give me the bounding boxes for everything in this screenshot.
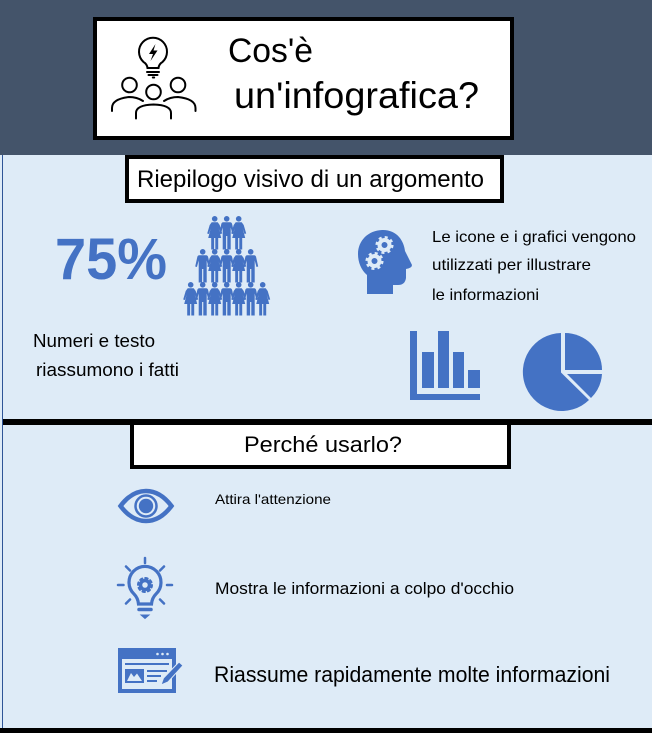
text: numbers and text: Numeri e testo xyxy=(33,331,155,351)
text: summarises quickly: Riassume rapidamente molte informazioni xyxy=(214,662,610,687)
header band xyxy=(0,0,652,155)
text: attention: Attira l'attenzione xyxy=(215,491,331,507)
heading: visual summary xyxy=(127,157,502,201)
bottom bar xyxy=(0,728,652,733)
text: at a glance: Mostra le informazioni a colpo d'occhio xyxy=(215,579,514,598)
text: numbers and text: riassumono i fatti xyxy=(36,360,179,380)
heading: why use it xyxy=(132,423,509,467)
heading: visual summary: Riepilogo visivo di un argomento xyxy=(137,166,484,193)
text: icons and charts: le informazioni xyxy=(432,287,539,304)
panel: title xyxy=(95,19,512,138)
title line 2: un'infografica? xyxy=(234,75,479,116)
text: icons and charts: utilizzati per illustrare xyxy=(432,257,591,274)
heading: why use it: Perché usarlo? xyxy=(244,432,402,457)
stat: 75%: 75% xyxy=(55,227,167,292)
icon: head with gears xyxy=(358,230,412,294)
text: icons and charts xyxy=(432,229,636,304)
icon: browser window with pencil xyxy=(118,648,183,693)
text: icons and charts: Le icone e i grafici vengono xyxy=(432,229,636,246)
left edge line xyxy=(2,155,3,730)
icon: people with lightbulb xyxy=(112,38,196,118)
icon: lightbulb with gear xyxy=(118,558,172,618)
icon: pie chart xyxy=(523,333,602,411)
text: numbers and text xyxy=(33,331,179,380)
icon: bar chart xyxy=(410,331,480,400)
icon: crowd of people xyxy=(183,216,270,316)
icon: eye xyxy=(120,491,172,521)
divider bar xyxy=(3,419,652,425)
title line 1: Cos'è xyxy=(228,32,313,70)
